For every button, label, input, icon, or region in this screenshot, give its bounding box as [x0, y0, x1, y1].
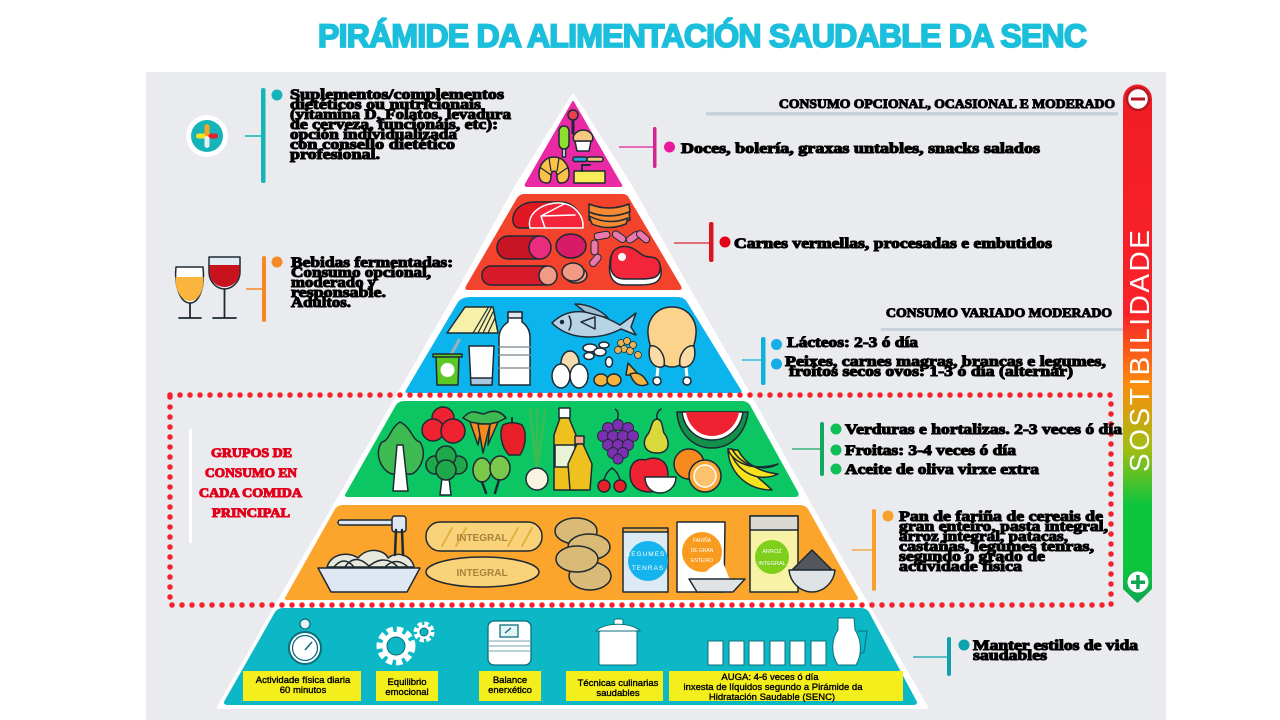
callout: supplements: opción individualizada	[290, 127, 458, 143]
callout: fermented drinks: Bebidas fermentadas:	[291, 255, 453, 271]
icon: flour bag: ENTEIRO	[691, 558, 713, 564]
label: tecnicas culinarias: Técnicas culinarias	[578, 678, 659, 689]
icon: loaf	[426, 557, 539, 587]
icon: chickpeas	[614, 338, 642, 358]
icon: jar of legumes	[623, 528, 668, 592]
tier: dairy and protein (blue)	[405, 297, 742, 393]
callout: dairy and protein: Peixes, carnes magras, brancas e legumes,	[785, 354, 1106, 370]
label: actividade fisica: Actividade física diaria	[256, 675, 351, 686]
heading: moderate consumption	[881, 305, 1123, 331]
callout: main meal groups	[189, 429, 303, 543]
label: equilibrio emocional	[376, 671, 438, 701]
label: tecnicas culinarias	[566, 671, 663, 701]
icon: jar of legumes: LEGUMES	[627, 551, 665, 558]
callout: fermented drinks	[246, 255, 453, 322]
callout: fermented drinks: moderado y	[291, 275, 377, 291]
icon: lollipop	[568, 110, 578, 133]
icon: cherries	[598, 468, 626, 492]
label: auga	[669, 671, 903, 703]
icon: gears	[380, 624, 432, 662]
icon: cupcake	[573, 130, 593, 151]
callout: main meal groups: CADA COMIDA	[199, 485, 303, 500]
icon: artichokes	[473, 456, 510, 493]
callout: grains: castañas, legumes tenras,	[899, 539, 1094, 555]
icon: oil jar	[568, 436, 592, 490]
icon: pepper	[501, 418, 525, 455]
icon: rice bag: INTEGRAL	[758, 561, 786, 567]
pyramid	[219, 96, 926, 707]
callout: fermented drinks: Consumo opcional,	[291, 265, 431, 281]
icon: chain sausages	[588, 229, 651, 268]
icon: water jug	[833, 618, 867, 665]
icon: wine glasses	[175, 257, 240, 318]
icon: supplements cross	[186, 115, 228, 157]
icon: sausages	[589, 204, 630, 228]
label: balance enerxetico	[479, 671, 541, 701]
callout: grains: segundo o grado de	[899, 549, 1046, 565]
icon: pot	[596, 619, 640, 665]
icon: potatoes	[555, 518, 611, 590]
icon: baguette	[426, 522, 542, 551]
tier: lifestyle (teal)	[224, 608, 917, 705]
callout: grains: Pan de fariña de cereais de	[899, 509, 1104, 525]
icon: beans	[583, 342, 612, 367]
icon: rice bag	[750, 516, 798, 592]
callout: supplements: profesional.	[290, 147, 380, 163]
icon: glass of milk	[469, 346, 494, 385]
icon: chicken	[648, 307, 696, 385]
icon: sausage	[482, 266, 557, 285]
callout: supplements: de cerveza, funcionais, etc):	[290, 117, 498, 133]
icon: pear	[644, 409, 668, 453]
callout: grains: actividade física	[899, 559, 1023, 575]
icon: grapes	[598, 409, 638, 464]
icon: chard	[378, 422, 423, 491]
sustainability bar	[1123, 84, 1155, 603]
icon: rice bag: ARROZ	[762, 549, 782, 555]
label: actividade fisica	[243, 671, 361, 701]
icon: fish	[552, 304, 636, 337]
icon: bananas	[728, 449, 778, 490]
heading: optional consumption: CONSUMO OPCIONAL, OCASIONAL E MODERADO	[779, 96, 1115, 111]
callout: fermented drinks: Adultos.	[291, 295, 351, 311]
callout: dairy and protein: froitos secos ovos: 1-3 ó día (alternar)	[789, 364, 1073, 380]
label: actividade fisica: 60 minutos	[280, 685, 326, 696]
callout: red meats: Carnes vermellas, procesadas e embutidos	[734, 236, 1052, 252]
icon: apple	[630, 458, 676, 493]
icon: flour bag	[677, 522, 745, 592]
callout: lifestyle	[913, 637, 1139, 676]
icon: stopwatch	[289, 619, 321, 664]
pyramid white outline	[219, 96, 926, 707]
icon: salami	[497, 236, 551, 259]
label: integral top: INTEGRAL	[456, 533, 508, 544]
label: auga: Hidratación Saudable (SENC)	[709, 692, 835, 703]
label: auga: inxesta de líquidos segundo a Pirámide da	[683, 682, 863, 693]
callout: grains	[852, 509, 1108, 591]
icon: milk bottle	[499, 312, 530, 385]
icon: eggs	[552, 351, 588, 388]
label: balance enerxetico: Balance	[493, 675, 527, 686]
icon: carrots	[463, 411, 506, 453]
label: equilibrio emocional: emocional	[385, 687, 429, 698]
callout: supplements: con consello dietético	[290, 137, 455, 153]
callout: vegetables and fruit: Aceite de oliva virxe extra	[845, 462, 1040, 478]
icon: broccoli	[426, 446, 467, 495]
callout: sweets	[619, 127, 1040, 168]
label: equilibrio emocional: Equilibrio	[387, 677, 427, 688]
callout: fermented drinks: responsable.	[291, 285, 386, 301]
icon: fork	[338, 516, 406, 555]
callout: lifestyle: Manter estilos de vida	[973, 638, 1139, 654]
background panel	[146, 72, 1166, 720]
icon: pasta bowl	[318, 550, 420, 592]
callout: grains: arroz integral, patacas,	[899, 529, 1068, 545]
callout: main meal groups: PRINCIPAL	[212, 505, 290, 520]
callout: supplements: dietéticos ou nutricionais	[290, 97, 481, 113]
icon: ice lolly	[559, 126, 569, 157]
icon: weighing scale	[488, 621, 531, 665]
callout: supplements: Suplementos/complementos	[290, 87, 504, 103]
icon: ham	[513, 202, 583, 228]
icon: croissant	[539, 157, 569, 183]
callout: vegetables and fruit: Froitas: 3-4 veces ó día	[845, 443, 1017, 459]
tier: sweets (pink)	[526, 102, 621, 186]
callout: main meal groups: GRUPOS DE	[211, 445, 292, 460]
icon: watermelon	[677, 412, 748, 448]
icon: lentils	[594, 374, 621, 386]
label: integral bottom: INTEGRAL	[456, 568, 508, 579]
tier: vegetables and fruit (green)	[345, 401, 799, 497]
callout: vegetables and fruit: Verduras e hortalizas. 2-3 veces ó día	[845, 422, 1123, 438]
icon: jar of legumes: TENRAS	[632, 565, 664, 572]
minus icon	[1127, 88, 1149, 110]
tier: meats (red)	[465, 194, 682, 290]
icon: flour bag: FARIÑA	[693, 537, 712, 544]
callout: vegetables and fruit	[792, 422, 1123, 478]
bar label: SOSTIBILIDADE	[1124, 230, 1155, 472]
icon: orange	[674, 449, 721, 492]
callout: dairy and protein	[742, 335, 1106, 385]
callout: lifestyle: saudables	[973, 648, 1047, 664]
callout: grains: gran enteiro, pasta integral,	[899, 519, 1108, 535]
label: tecnicas culinarias: saudables	[596, 688, 640, 699]
callout: red meats	[674, 222, 1052, 262]
icon: nuts	[626, 363, 648, 386]
icon: butter and knife	[573, 157, 605, 183]
icon: spring onion	[526, 409, 548, 490]
title: PIRÁMIDE DA ALIMENTACIÓN SAUDABLE DA SENC	[318, 18, 1087, 54]
plus icon	[1128, 572, 1148, 592]
callout: supplements: (vitamina D, Folatos, levadura	[290, 107, 512, 123]
label: balance enerxetico: enerxético	[488, 685, 532, 696]
callout: main meal groups: CONSUMO EN	[205, 465, 298, 480]
icon: salami slice	[556, 234, 586, 258]
icon: cheese	[447, 307, 498, 333]
heading: moderate consumption: CONSUMO VARIADO MODERADO	[886, 305, 1112, 320]
icon: sausage slices	[562, 263, 587, 283]
icon: steak	[610, 246, 661, 285]
callout: dairy and protein: Lácteos: 2-3 ó día	[787, 335, 919, 351]
dotted red box	[170, 395, 1111, 605]
label: auga: AUGA: 4-6 veces ó día	[721, 672, 819, 683]
icon: water glasses	[708, 641, 826, 665]
icon: oil bottle	[554, 408, 576, 490]
icon: flour bag: DE GRAN	[691, 548, 714, 554]
callout: supplements	[245, 87, 512, 183]
callout: sweets: Doces, bolería, graxas untables, snacks salados	[681, 141, 1040, 157]
heading: optional consumption	[706, 96, 1118, 116]
icon: yogurt	[433, 340, 462, 385]
icon: rice bowl	[789, 550, 835, 592]
tier: grains (orange)	[285, 505, 858, 600]
icon: tomatoes	[422, 407, 465, 443]
